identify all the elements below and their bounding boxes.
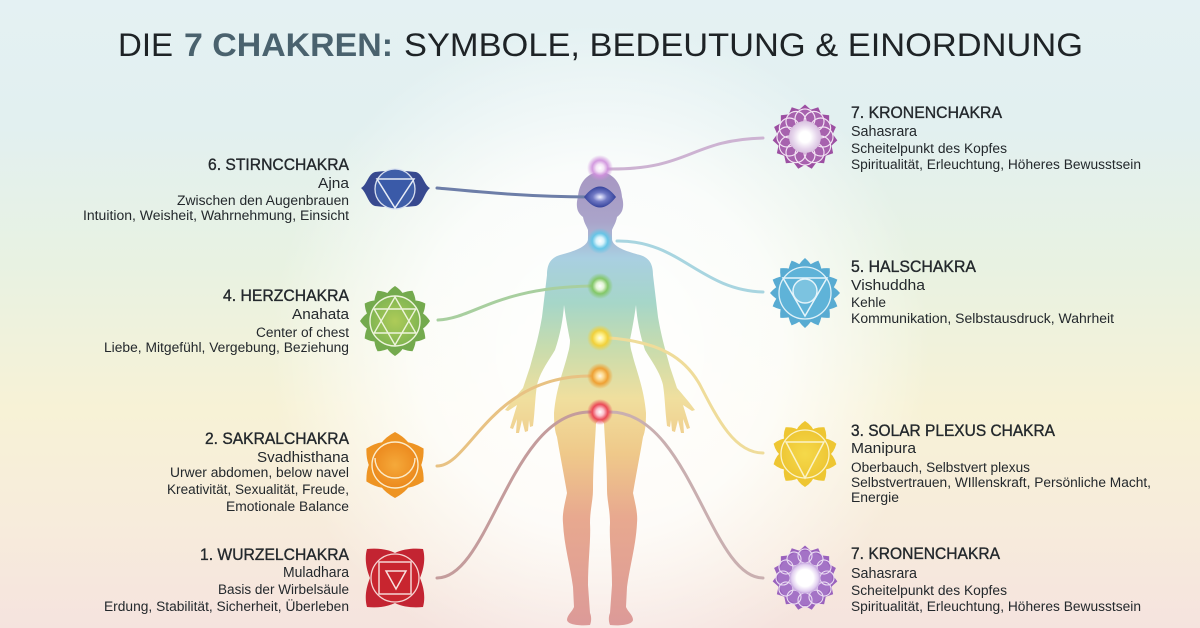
text: 6 Stirnchakra: Ajna: [318, 175, 350, 192]
text: 7 Kronenchakra top: Spiritualität, Erleuchtung, Höheres Bewusstsein: [851, 157, 1141, 172]
text: 2 Sakralchakra: Svadhisthana: [257, 449, 350, 466]
text: 2 Sakralchakra: Kreativität, Sexualität, Freude,: [167, 482, 349, 497]
text: 7 Kronenchakra top: Scheitelpunkt des Kopfes: [851, 141, 1007, 156]
title: 7 CHAKREN:: [184, 27, 393, 63]
connector: heart: [438, 286, 590, 320]
text: 3 Solar Plexus Chakra: Oberbauch, Selbstvert plexus: [851, 460, 1030, 475]
icon: svadhisthana: [357, 432, 433, 498]
body nodes: [584, 155, 616, 425]
text: 7 Kronenchakra top: 7. KRONENCHAKRA: [851, 104, 1002, 122]
text: 2 Sakralchakra: 2. SAKRALCHAKRA: [205, 430, 349, 448]
text: 2 Sakralchakra: [167, 430, 350, 514]
text: 7 Kronenchakra bottom: Scheitelpunkt des Kopfes: [851, 583, 1007, 598]
icon: muladhara: [366, 549, 424, 607]
connector: root left: [437, 412, 590, 578]
text: 1 Wurzelchakra: Erdung, Stabilität, Sicherheit, Überleben: [104, 599, 349, 614]
text: 4 Herzchakra: [104, 287, 350, 355]
icon: sahasrara bottom: [771, 545, 839, 612]
title: [118, 27, 1083, 63]
title: SYMBOLE, BEDEUTUNG & EINORDNUNG: [404, 27, 1083, 63]
text: 3 Solar Plexus Chakra: Manipura: [851, 440, 917, 457]
text: 5 Halschakra: Kommunikation, Selbstausdruck, Wahrheit: [851, 311, 1114, 326]
icon: anahata: [360, 286, 430, 356]
text: 1 Wurzelchakra: 1. WURZELCHAKRA: [200, 546, 349, 564]
text: 7 Kronenchakra bottom: Spiritualität, Erleuchtung, Höheres Bewusstsein: [851, 599, 1141, 614]
connector: crown: [608, 138, 763, 169]
icon: ajna: [361, 169, 430, 209]
connector: throat: [617, 241, 763, 292]
text: 7 Kronenchakra bottom: [851, 545, 1141, 614]
title: DIE: [118, 27, 173, 63]
text: 6 Stirnchakra: [83, 156, 350, 223]
text: 5 Halschakra: Vishuddha: [851, 277, 926, 294]
text: 7 Kronenchakra top: Sahasrara: [851, 123, 918, 140]
text: 6 Stirnchakra: 6. STIRNCCHAKRA: [208, 156, 349, 174]
text: 6 Stirnchakra: Zwischen den Augenbrauen: [177, 193, 349, 208]
text: 5 Halschakra: Kehle: [851, 295, 886, 310]
text: 7 Kronenchakra bottom: 7. KRONENCHAKRA: [851, 545, 1000, 563]
connector: root right: [610, 412, 763, 578]
connector: third eye: [437, 188, 590, 197]
text: 4 Herzchakra: Center of chest: [256, 325, 349, 340]
text: 4 Herzchakra: Liebe, Mitgefühl, Vergebung, Beziehung: [104, 340, 349, 355]
text: 1 Wurzelchakra: [104, 546, 350, 614]
text: 5 Halschakra: 5. HALSCHAKRA: [851, 258, 976, 276]
text: 4 Herzchakra: Anahata: [292, 306, 350, 323]
connector: sacral: [437, 376, 590, 466]
body silhouette: [505, 172, 695, 625]
text: 3 Solar Plexus Chakra: Selbstvertrauen, WIllenskraft, Persönliche Macht,: [851, 475, 1151, 490]
text: 2 Sakralchakra: Emotionale Balance: [226, 499, 349, 514]
connector: solar plexus: [610, 338, 763, 453]
icon: vishuddha: [769, 257, 841, 329]
text: 3 Solar Plexus Chakra: 3. SOLAR PLEXUS CHAKRA: [851, 422, 1055, 440]
text: 5 Halschakra: [851, 258, 1114, 326]
text: 2 Sakralchakra: Urwer abdomen, below navel: [170, 465, 349, 480]
icon: sahasrara top: [771, 104, 839, 171]
icon: manipura: [771, 421, 839, 487]
text: 4 Herzchakra: 4. HERZCHAKRA: [223, 287, 349, 305]
text: 7 Kronenchakra top: [851, 104, 1141, 172]
text: 3 Solar Plexus Chakra: [851, 422, 1151, 505]
text: 3 Solar Plexus Chakra: Energie: [851, 490, 899, 505]
text: 1 Wurzelchakra: Muladhara: [283, 564, 350, 581]
text: 1 Wurzelchakra: Basis der Wirbelsäule: [218, 582, 349, 597]
text: 6 Stirnchakra: Intuition, Weisheit, Wahrnehmung, Einsicht: [83, 208, 349, 223]
text: 7 Kronenchakra bottom: Sahasrara: [851, 565, 918, 582]
